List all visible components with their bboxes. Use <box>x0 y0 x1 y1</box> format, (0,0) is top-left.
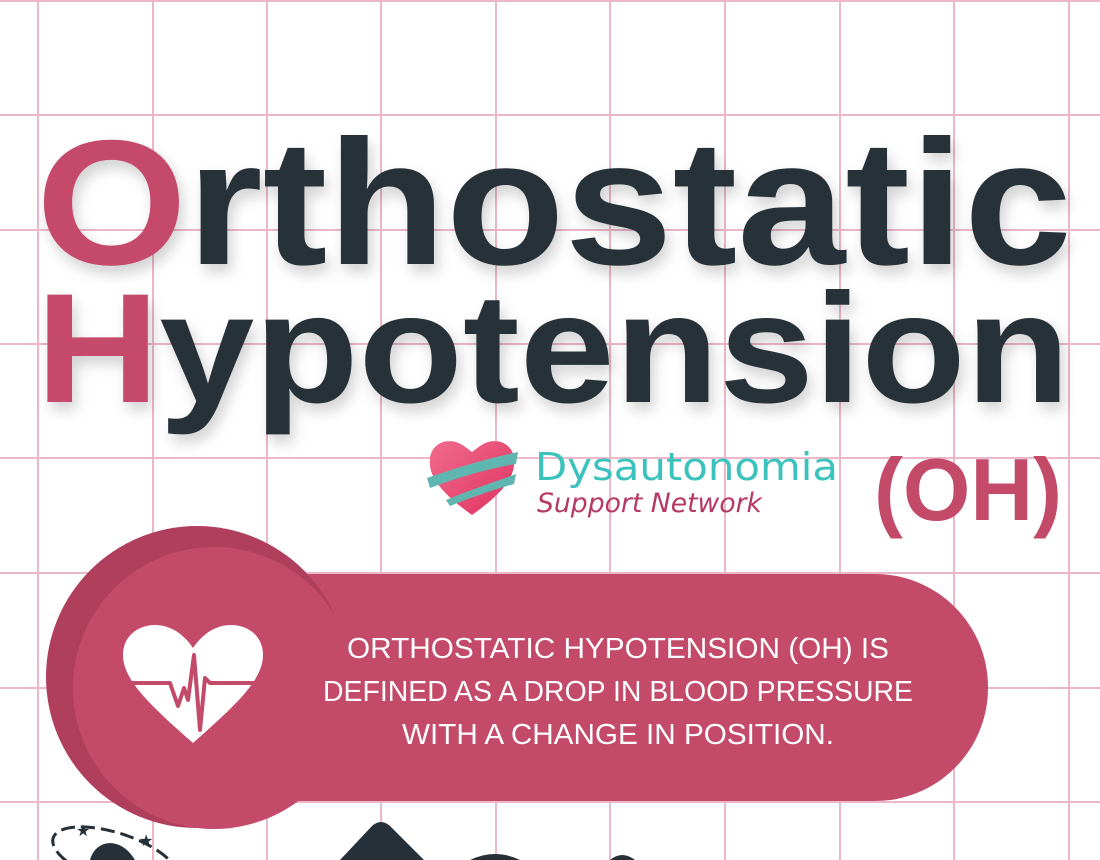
definition text: WITH A CHANGE IN POSITION. <box>402 719 834 751</box>
icon: dark shapes (partial) <box>340 822 635 860</box>
icon: heart with ribbon <box>427 441 518 515</box>
icon: heart with heartbeat <box>123 625 263 743</box>
logo: Dysautonomia Support Network <box>427 441 838 519</box>
title line 2: Hypotension <box>36 262 1070 436</box>
definition text <box>323 633 913 751</box>
logo: Dysautonomia Support Network: Support Network <box>537 488 763 519</box>
icon: dizzy head (partial): ★ <box>76 823 90 840</box>
definition text: ORTHOSTATIC HYPOTENSION (OH) IS <box>347 633 889 665</box>
logo text: Dysautonomia <box>535 445 838 489</box>
panel: definition <box>46 526 988 829</box>
abbreviation (OH): (OH) <box>874 440 1062 539</box>
definition text: DEFINED AS A DROP IN BLOOD PRESSURE <box>323 676 913 708</box>
icon: dizzy head (partial): ★ <box>139 833 153 850</box>
title <box>36 103 1072 436</box>
title line 1: Orthostatic <box>36 103 1072 302</box>
icon: dizzy head (partial) <box>45 814 185 860</box>
